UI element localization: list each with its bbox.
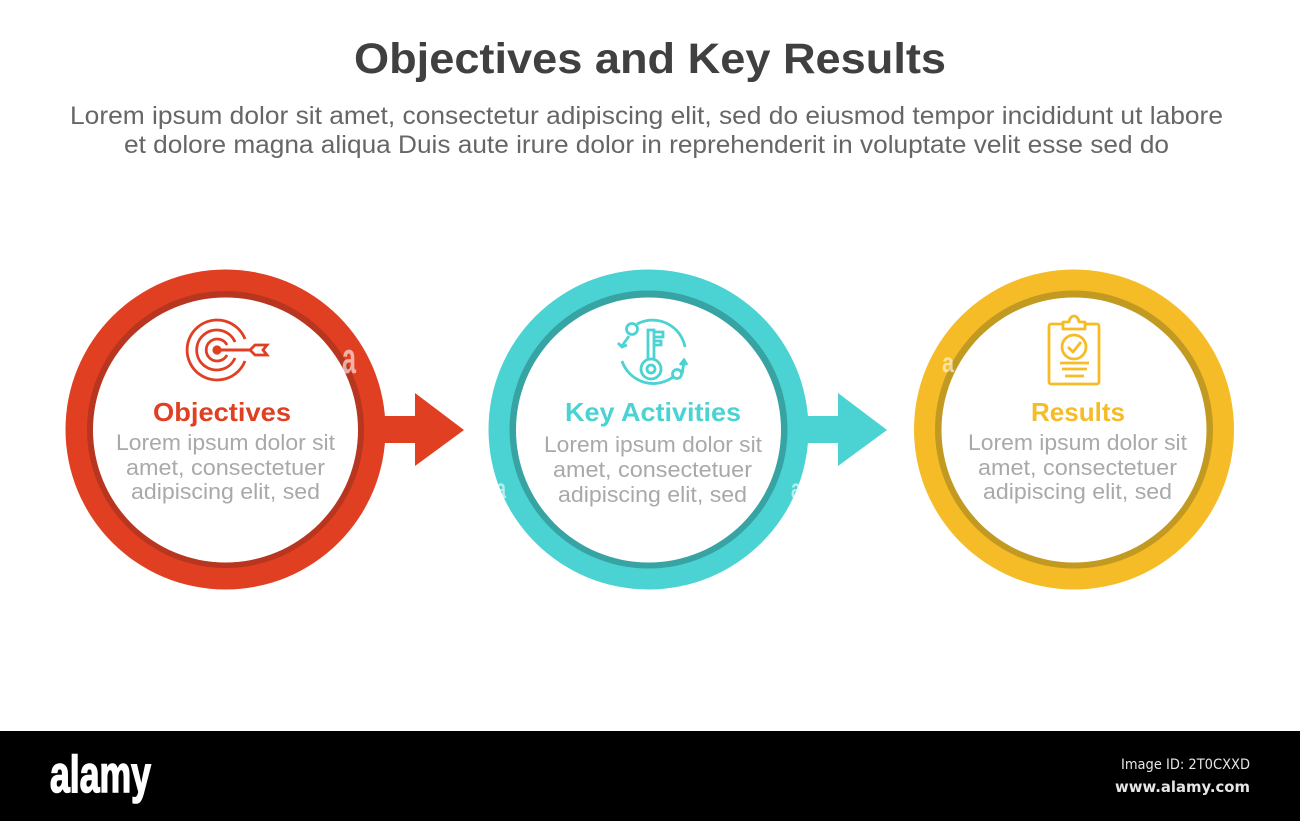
intro text [70, 102, 1223, 159]
panel: key activities [488, 270, 887, 590]
panel: results [914, 270, 1234, 590]
ring: objectives [66, 270, 386, 590]
text: objectives body: adipiscing elit, sed [131, 479, 320, 504]
icon: key in cycle [618, 320, 687, 384]
panel: objectives [66, 270, 464, 590]
title: Objectives and Key Results [354, 35, 946, 83]
watermark letter: a [942, 347, 954, 378]
image id: Image ID: 2T0CXXD [1121, 757, 1250, 773]
text: results body: Lorem ipsum dolor sit [968, 430, 1187, 455]
logo: alamy: alamy [50, 746, 151, 804]
arrow: objectives to key activities [380, 393, 464, 466]
text: key activities body: adipiscing elit, sed [558, 482, 747, 507]
text: results body [968, 430, 1187, 504]
text: objectives body: amet, consectetuer [126, 455, 325, 480]
watermark letters: a [496, 473, 506, 504]
heading: objectives: Objectives [153, 397, 291, 427]
ring: results [914, 270, 1234, 590]
icon: clipboard with check [1049, 316, 1099, 384]
website: www.alamy.com [1115, 778, 1250, 796]
arrow: key activities to results [803, 393, 887, 466]
text: results body: adipiscing elit, sed [983, 479, 1172, 504]
heading: results: Results [1031, 397, 1125, 427]
footer bar [0, 731, 1300, 821]
text: key activities body: amet, consectetuer [553, 457, 752, 482]
text: objectives body [116, 430, 335, 504]
intro text: et dolore magna aliqua Duis aute irure dolor in reprehenderit in voluptate velit esse sed do [124, 131, 1169, 159]
watermark letter: a [342, 334, 356, 383]
watermark letters [496, 473, 801, 504]
text: results body: amet, consectetuer [978, 455, 1177, 480]
heading: key activities: Key Activities [565, 397, 741, 427]
text: key activities body: Lorem ipsum dolor sit [544, 432, 762, 457]
text: key activities body [544, 432, 762, 507]
intro text: Lorem ipsum dolor sit amet, consectetur adipiscing elit, sed do eiusmod tempor incididunt ut labore [70, 102, 1223, 130]
icon: target with arrow [187, 320, 267, 380]
watermark letters: a [791, 473, 801, 504]
ring: key activities [488, 270, 808, 590]
text: objectives body: Lorem ipsum dolor sit [116, 430, 335, 455]
